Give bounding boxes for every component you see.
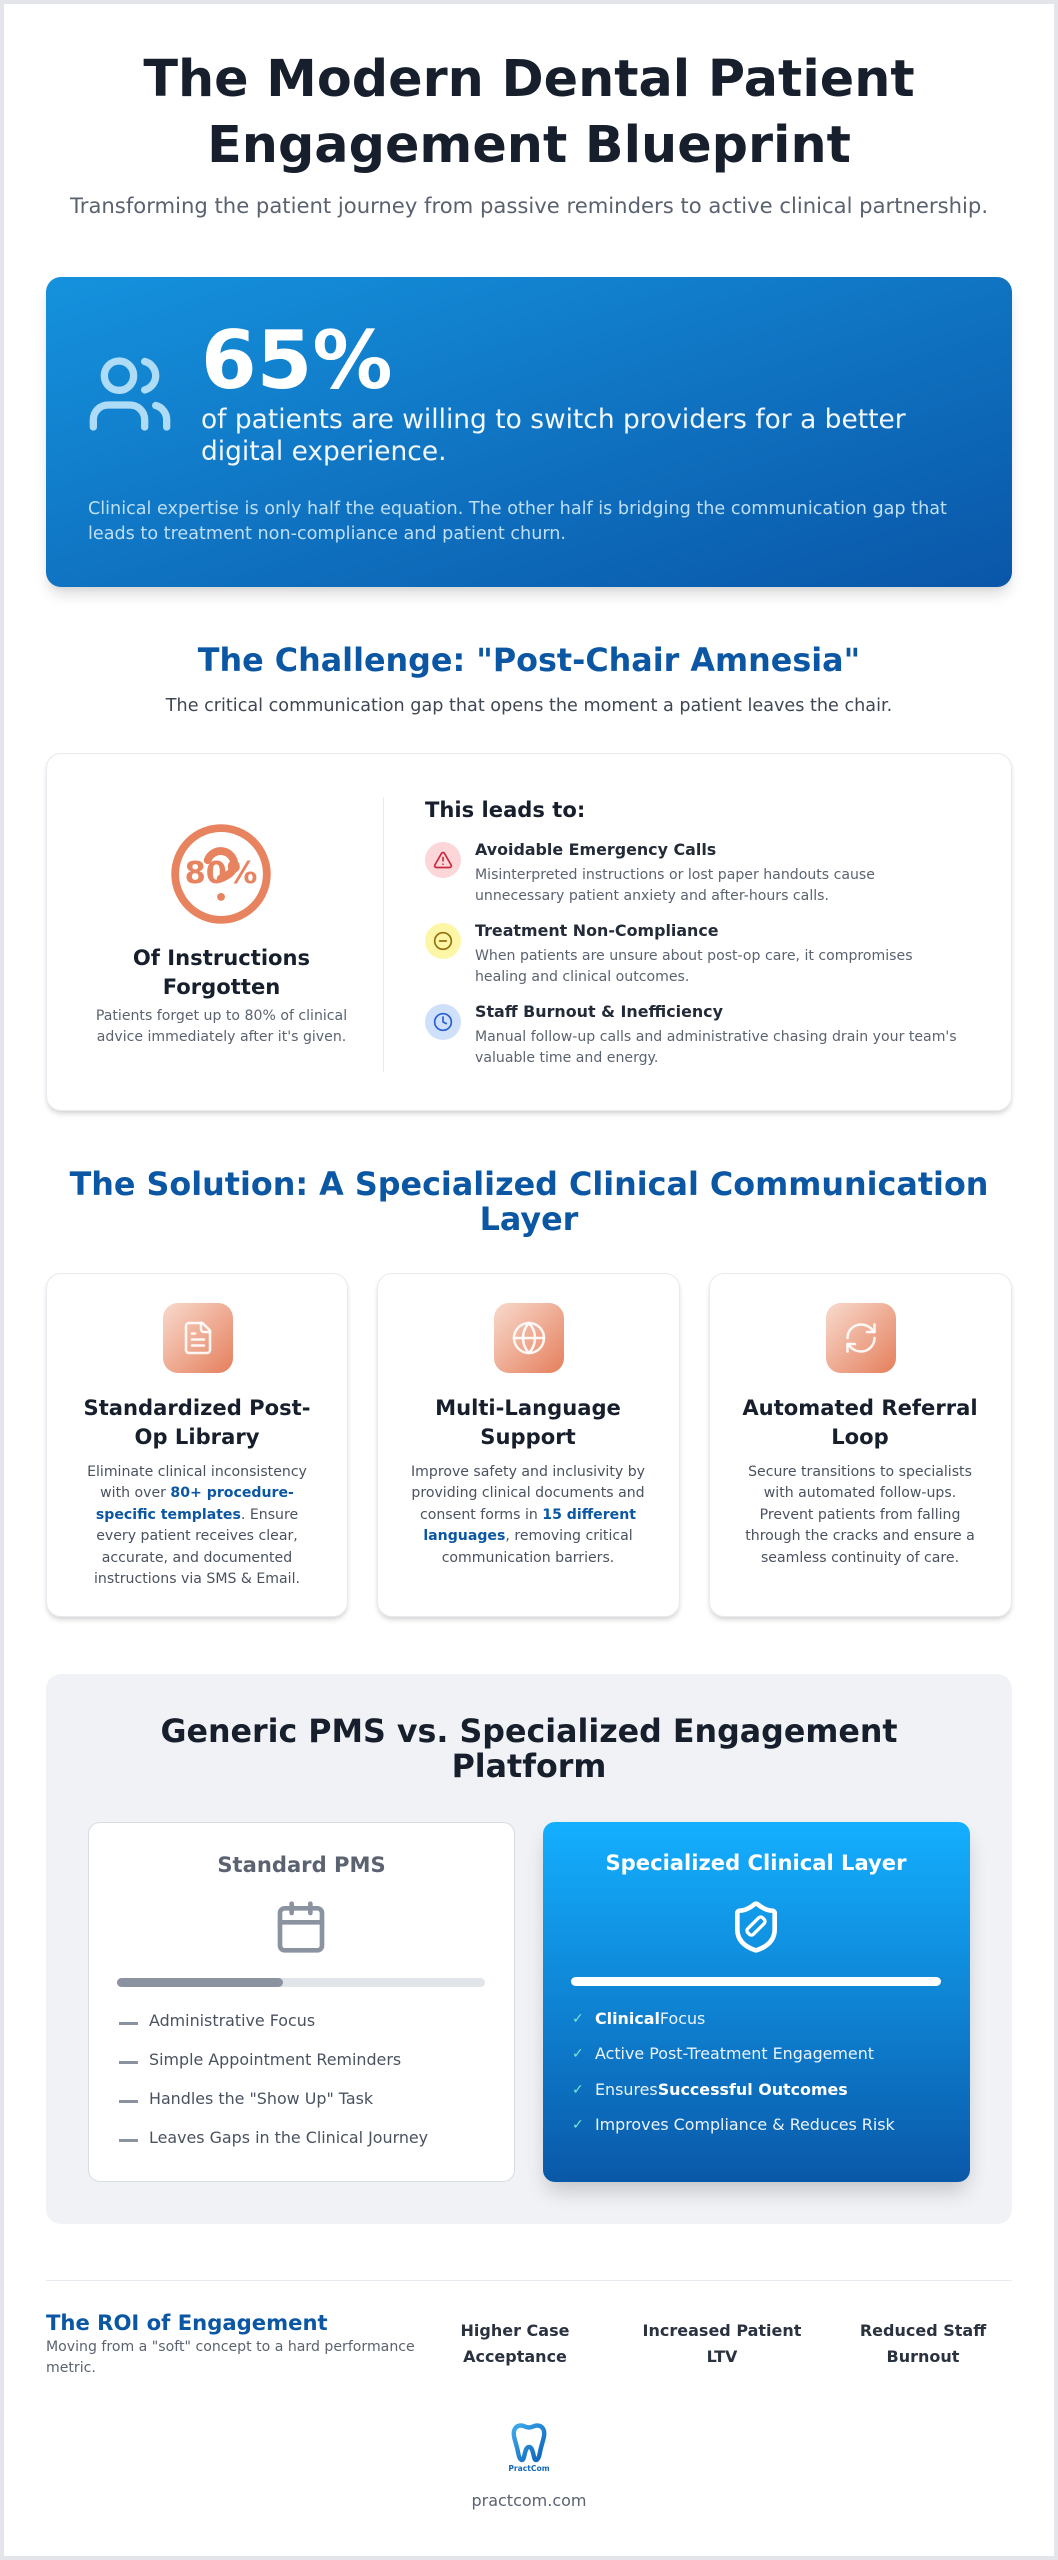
card title: Standardized Post- [84,1395,310,1420]
feature list: ✓ [572,2117,584,2133]
ROI item: case acceptance [461,2321,569,2366]
card text: every patient receives clear, [96,1528,298,1544]
feature list: Simple Appointment Reminders [149,2050,401,2069]
card: standard PMS [88,1822,515,2182]
card title [84,1395,310,1449]
icon: refresh [826,1303,896,1373]
stat description: Patients forget up to 80% of clinical [96,1008,347,1024]
ROI item: case acceptance: Higher Case [461,2321,569,2340]
panel: hero statistic [46,277,1012,587]
item: burnout: Manual follow-up calls and administrative chasing drain your team's [475,1029,957,1045]
card: specialized clinical layer [543,1822,970,2182]
item: non-compliance: Treatment Non-Compliance [475,921,719,940]
stat description: advice immediately after it's given. [97,1029,346,1045]
icon: calendar [278,1901,324,1953]
feature list: EnsuresSuccessful Outcomes [595,2080,848,2099]
card title: Multi-Language [435,1395,621,1420]
comparison heading: Platform [452,1749,606,1785]
icon: warning [425,842,461,878]
ROI text block [46,2310,415,2376]
item: emergency calls [425,840,875,904]
hero supporting text [88,499,947,544]
ROI item: patient LTV [643,2321,802,2366]
icon: minus [425,923,461,959]
heading: the challenge: The Challenge: "Post-Chair Amnesia" [198,642,860,679]
card text: communication barriers. [442,1550,614,1566]
item: emergency calls: Misinterpreted instructions or lost paper handouts cause [475,867,875,883]
feature list: ✓ [572,2011,584,2027]
progress bar [117,1978,485,1987]
challenge subheading: The critical communication gap that opens the moment a patient leaves the chair. [166,696,892,716]
ROI item: staff burnout: Burnout [887,2347,959,2366]
item: non-compliance [425,921,913,985]
feature list: Active Post-Treatment Engagement [595,2044,874,2063]
hero statement: digital experience. [201,436,447,467]
feature list: ✓ [572,2046,584,2062]
big number 65%: 65% [201,314,392,407]
subtitle: Transforming the patient journey from passive reminders to active clinical partnership. [70,193,988,218]
stat description [96,1008,347,1045]
card text: specific templates. Ensure [96,1507,298,1523]
footer website: practcom.com [471,2491,587,2510]
card: multi-language [377,1273,680,1617]
list heading: This leads to: [425,797,585,822]
title: Engagement Blueprint [207,115,851,174]
logo: PractCom tooth: PractCom [508,2464,550,2473]
card: post-op library [46,1273,348,1617]
item: burnout: Staff Burnout & Inefficiency [475,1002,723,1021]
item: emergency calls: Avoidable Emergency Calls [475,840,716,859]
icon: clock [425,1004,461,1040]
card: referral loop [709,1273,1012,1617]
card title: Automated Referral [742,1395,978,1420]
icon: 80 percent forgotten [171,824,271,924]
card text: accurate, and documented [102,1550,292,1566]
panel: challenge [46,753,1012,1111]
card title [435,1395,621,1449]
hero statement [201,404,906,467]
ROI description: metric. [46,2360,96,2376]
card title: Op Library [135,1424,259,1449]
ROI heading: The ROI of Engagement [46,2310,328,2335]
ROI description: Moving from a "soft" concept to a hard performance [46,2339,415,2355]
card text: Improve safety and inclusivity by [411,1464,645,1480]
ROI item: staff burnout: Reduced Staff [860,2321,986,2340]
ROI item: case acceptance: Acceptance [463,2347,567,2366]
card text: with automated follow-ups. [764,1485,956,1501]
feature list: Leaves Gaps in the Clinical Journey [149,2128,428,2147]
feature list: Handles the "Show Up" Task [149,2089,373,2108]
card title: Standard PMS [217,1852,386,1877]
logo: PractCom tooth [508,2423,550,2473]
title: The Modern Dental Patient [143,49,915,108]
feature list [572,2009,895,2134]
title [143,49,915,174]
comparison heading: Generic PMS vs. Specialized Engagement [160,1714,898,1750]
icon: shield [735,1901,777,1953]
icon: 80 percent forgotten: 80% [185,856,257,891]
feature list: ✓ [572,2082,584,2098]
feature list: Improves Compliance & Reduces Risk [595,2115,895,2134]
heading: the solution [70,1166,988,1238]
card text: with over 80+ procedure- [100,1485,294,1501]
card text: Prevent patients from falling [760,1507,960,1523]
icon: document [163,1303,233,1373]
card text [87,1464,307,1587]
icon: users [90,357,170,431]
panel: comparison [46,1674,1012,2224]
card text: through the cracks and ensure a [745,1528,975,1544]
stat title: Of Instructions [133,945,310,970]
card text: seamless continuity of care. [761,1550,959,1566]
card text [411,1464,645,1566]
comparison heading [160,1714,898,1785]
ROI item: patient LTV: LTV [707,2347,737,2366]
heading: the solution: Layer [480,1201,578,1238]
stat title [133,945,310,999]
card text [745,1464,975,1566]
heading: the solution: The Solution: A Specialized Clinical Communication [70,1166,988,1203]
feature list: ClinicalFocus [595,2009,705,2028]
hero statement: of patients are willing to switch providers for a better [201,404,906,435]
ROI item: staff burnout [860,2321,986,2366]
card text: Secure transitions to specialists [748,1464,972,1480]
card text: Eliminate clinical inconsistency [87,1464,307,1480]
card text: languages, removing critical [423,1528,633,1544]
feature list: Administrative Focus [149,2011,315,2030]
item: non-compliance: healing and clinical outcomes. [475,969,689,985]
stat title: Forgotten [163,974,280,999]
card title [742,1395,978,1449]
consequences list [425,797,957,1066]
card text: instructions via SMS & Email. [94,1571,300,1587]
card text: providing clinical documents and [411,1485,645,1501]
feature list [119,2011,428,2147]
ROI item: patient LTV: Increased Patient [643,2321,801,2340]
ROI description [46,2339,415,2376]
icon: globe [494,1303,564,1373]
hero supporting text: Clinical expertise is only half the equation. The other half is bridging the communication gap that [88,499,947,519]
item: burnout: valuable time and energy. [475,1050,658,1066]
card title: Support [480,1424,576,1449]
card title: Loop [831,1424,889,1449]
card text: consent forms in 15 different [420,1507,636,1523]
item: burnout [425,1002,957,1066]
card title: Specialized Clinical Layer [605,1850,907,1875]
item: non-compliance: When patients are unsure about post-op care, it compromises [475,948,913,964]
progress bar [571,1977,941,1986]
item: emergency calls: unnecessary patient anxiety and after-hours calls. [475,888,829,904]
hero supporting text: leads to treatment non-compliance and patient churn. [88,524,566,544]
